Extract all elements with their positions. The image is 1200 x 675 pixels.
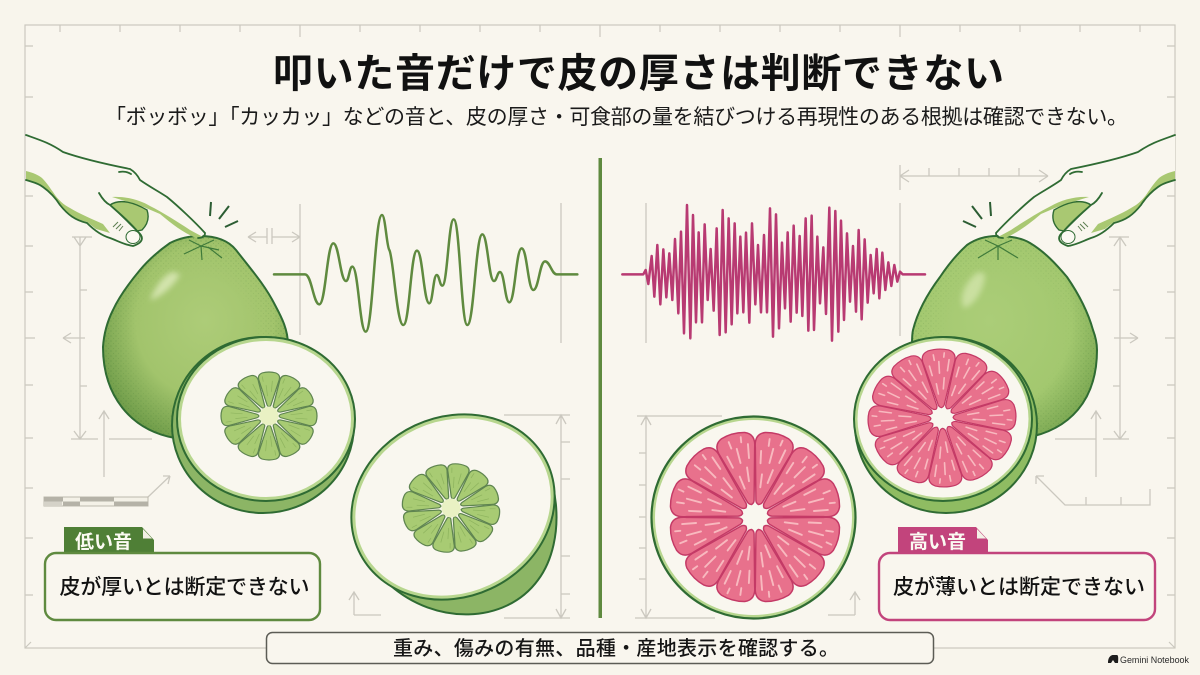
- center divider: [598, 158, 602, 618]
- panel: low sound: [26, 135, 585, 633]
- title: 叩いた音だけで皮の厚さは判断できない: [273, 52, 1004, 96]
- icon: tapping hand: [963, 135, 1175, 246]
- callout: low sound: [45, 527, 320, 620]
- tag: low sound: 低い音: [75, 531, 132, 553]
- icon: thick-rind slice, lower: [321, 381, 585, 633]
- icon: whole green pomelo: [103, 236, 288, 438]
- tag: high sound: 高い音: [909, 531, 966, 553]
- dimension lines: [63, 165, 1150, 618]
- subtitle: 「ボッボッ」「カッカッ」などの音と、皮の厚さ・可食部の量を結びつける再現性のある根拠は確認できない。: [105, 106, 1128, 129]
- callout: high sound: 皮が薄いとは断定できない: [893, 576, 1145, 599]
- callout: low sound: 皮が厚いとは断定できない: [60, 576, 310, 599]
- low-pitched waveform: [274, 215, 577, 332]
- watermark: Gemini Notebook: Gemini Notebook: [1120, 655, 1189, 666]
- icon: tapping hand: [26, 135, 238, 246]
- tag: high sound: [898, 527, 988, 553]
- icon: thin-rind slice, upper: [854, 337, 1037, 513]
- bottom note: [266, 632, 934, 664]
- scale bar: [44, 497, 148, 506]
- high-pitched waveform: [622, 205, 925, 341]
- icon: thick-rind slice, upper: [172, 337, 355, 513]
- panel: high sound: [622, 135, 1175, 622]
- bottom note: 重み、傷みの有無、品種・産地表示を確認する。: [393, 637, 839, 660]
- tag: low sound: [64, 527, 154, 553]
- icon: whole green pomelo: [912, 236, 1097, 438]
- icon: thin-rind slice, lower: [650, 412, 860, 622]
- callout: high sound: [879, 527, 1155, 620]
